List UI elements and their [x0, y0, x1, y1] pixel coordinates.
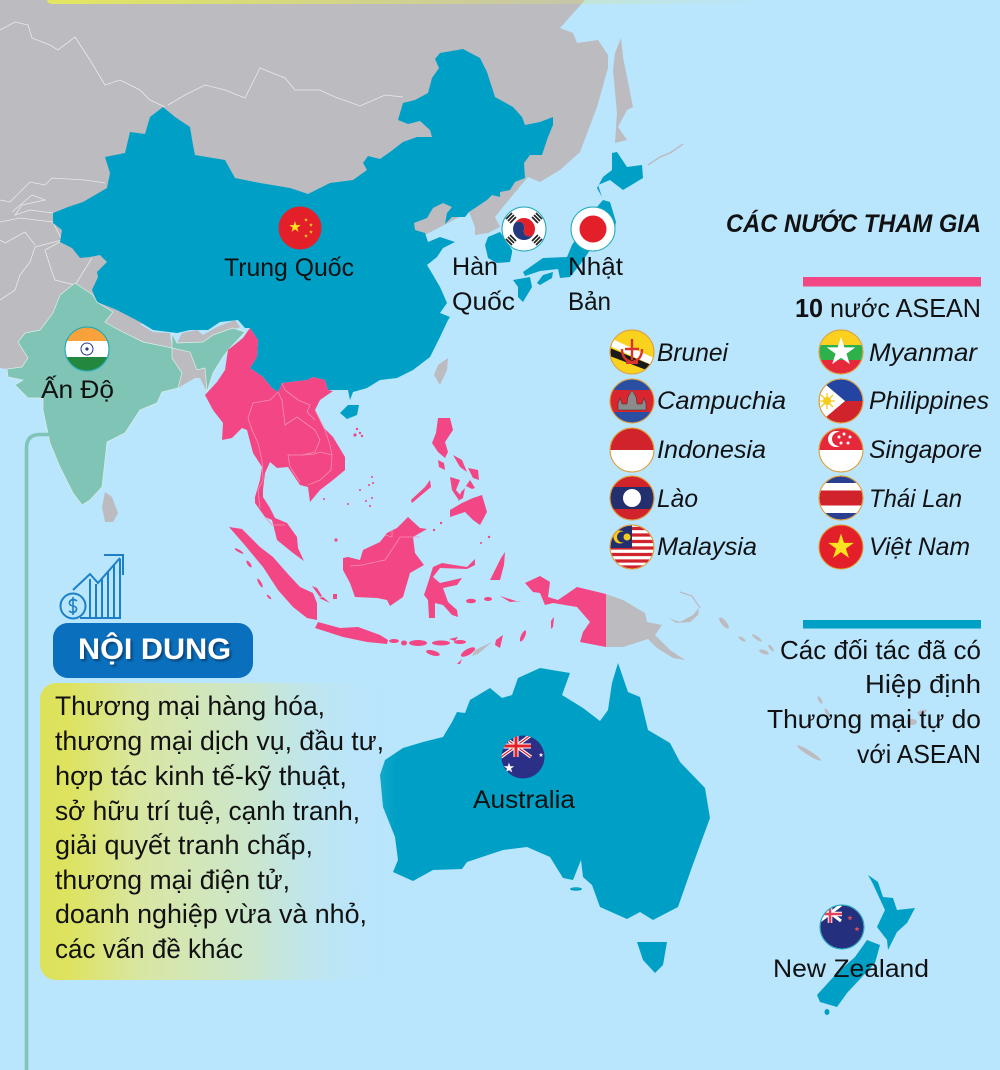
panel: content list: doanh nghiệp vừa và nhỏ, [55, 899, 367, 929]
label: Lào: Lào [657, 485, 698, 513]
legend bar: FTA partners [803, 620, 981, 628]
flag: Myanmar [819, 330, 863, 374]
label: Singapore: Singapore [869, 436, 982, 464]
map: China [53, 49, 553, 400]
label: Australia: Australia [473, 786, 575, 814]
timeline connector [26, 434, 50, 1070]
map: grey non-member land [0, 0, 927, 762]
flag: Cambodia [610, 379, 654, 423]
panel: content list: các vấn đề khác [55, 934, 243, 964]
label: Hàn Quốc: Quốc [452, 288, 515, 316]
label: Hàn Quốc: Hàn [452, 253, 498, 281]
label: Thái Lan: Thái Lan [869, 485, 962, 513]
panel: content list [40, 683, 395, 980]
legend label: 10 nước ASEAN: 10 nước ASEAN [795, 293, 981, 323]
panel: content list: thương mại điện tử, [55, 865, 290, 895]
panel: content list: giải quyết tranh chấp, [55, 830, 313, 860]
label: New Zealand: New Zealand [773, 955, 929, 983]
heading: participating countries: CÁC NƯỚC THAM GIA [726, 209, 981, 238]
label: Indonesia: Indonesia [657, 436, 766, 464]
label: Nhật Bản: Bản [568, 288, 611, 316]
label: Philippines: Philippines [869, 387, 989, 415]
label: Brunei: Brunei [657, 339, 729, 367]
label: Nhật Bản: Nhật [568, 253, 623, 281]
flag: Japan [571, 207, 615, 251]
legend label: FTA partners: với ASEAN [857, 739, 981, 769]
map: Australia [380, 663, 710, 920]
heading: NỘI DUNG [53, 623, 253, 678]
legend label: FTA partners: Các đối tác đã có [780, 635, 981, 665]
map: India [7, 283, 245, 505]
panel: content list: sở hữu trí tuệ, cạnh tranh, [55, 796, 360, 826]
panel: content list: Thương mại hàng hóa, [55, 691, 325, 721]
label: Campuchia: Campuchia [657, 387, 786, 415]
map: ASEAN member states [205, 328, 606, 664]
flag: Thailand [819, 476, 863, 520]
label: Myanmar: Myanmar [869, 339, 979, 367]
map: Tasmania and Kangaroo Island [570, 887, 667, 973]
label: Ấn Độ: Ấn Độ [41, 375, 114, 404]
panel: content list: hợp tác kinh tế-kỹ thuật, [55, 761, 347, 791]
flag: Philippines [819, 379, 863, 423]
flag: Indonesia [610, 428, 654, 472]
legend label: FTA partners: Hiệp định [865, 669, 981, 699]
flag: Laos [610, 476, 654, 520]
panel: content list: thương mại dịch vụ, đầu tư, [55, 726, 384, 756]
flag: Brunei [610, 330, 654, 374]
map: Japan, South Korea [485, 152, 643, 302]
heading: NỘI DUNG: NỘI DUNG [78, 632, 231, 666]
legend label: FTA partners: Thương mại tự do [767, 704, 981, 734]
flag: China [278, 206, 322, 250]
label: Hàn Quốc [452, 253, 515, 316]
inner ASEAN borders [248, 383, 420, 566]
flag: South Korea [502, 207, 546, 251]
label: Malaysia: Malaysia [657, 533, 757, 561]
map: Hainan [340, 405, 359, 419]
flag: Malaysia [610, 525, 654, 569]
icon: growth chart and dollar coin [60, 555, 123, 618]
grey land border lines [0, 22, 403, 300]
legend label: FTA partners [767, 635, 981, 769]
label: Trung Quốc: Trung Quốc [224, 254, 354, 282]
label: Việt Nam: Việt Nam [869, 533, 970, 561]
label: Nhật Bản [568, 253, 623, 316]
top highlight bar [47, 0, 760, 4]
flag: Singapore [819, 428, 863, 472]
flag: New Zealand [820, 905, 864, 949]
legend bar: ASEAN [803, 277, 981, 286]
flag: Vietnam [819, 525, 863, 569]
flag: Australia [501, 735, 545, 779]
flag: India [65, 327, 109, 371]
map: New Zealand [817, 875, 915, 1015]
